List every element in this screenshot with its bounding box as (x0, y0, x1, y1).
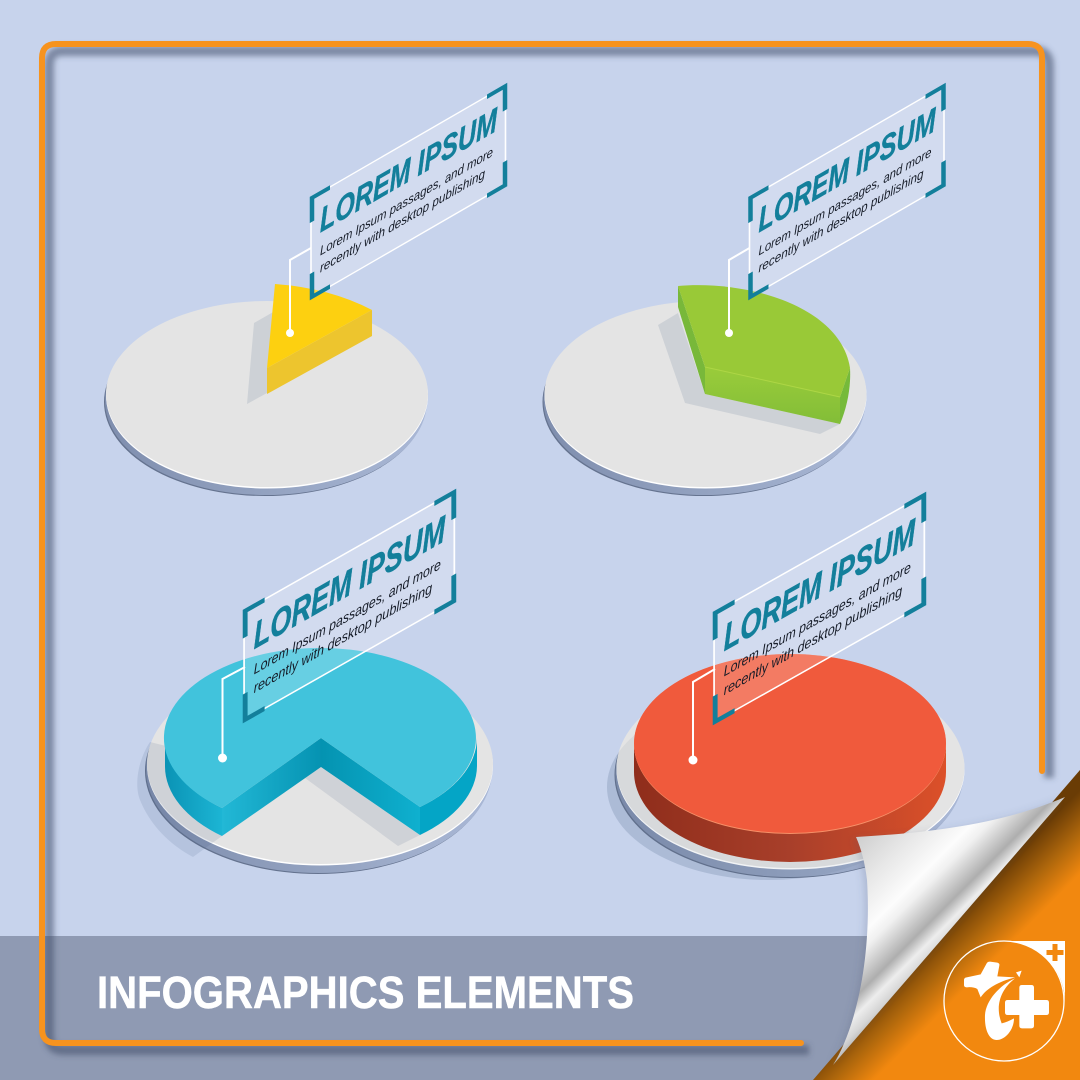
label card: Lorem Ipsum passages, and more (254, 556, 441, 678)
logo corner with plus (1004, 941, 1065, 1002)
label card: recently with desktop publishing (254, 580, 433, 697)
label card: Lorem Ipsum passages, and more (724, 559, 911, 680)
label card: LOREM IPSUM (320, 99, 498, 240)
leader line and dot (286, 248, 311, 337)
panel: cyan three-quarter pie (137, 492, 493, 874)
cyan pie body (164, 648, 477, 836)
green slice (678, 285, 850, 424)
title: INFOGRAPHICS ELEMENTS (97, 967, 634, 1018)
panel: red full pie (607, 495, 964, 880)
panel: green slice pie (542, 86, 944, 496)
disc base (145, 664, 493, 874)
label card (244, 492, 454, 720)
label card (750, 86, 944, 297)
title band (0, 936, 880, 1080)
label card: recently with desktop publishing (320, 165, 485, 275)
label card: Lorem Ipsum passages, and more (320, 144, 493, 258)
label card: recently with desktop publishing (724, 582, 903, 699)
leader line and dot (725, 248, 750, 337)
leader line and dot (218, 667, 245, 762)
label card (714, 495, 924, 722)
leader line and dot (688, 669, 715, 764)
yellow slice (267, 284, 372, 394)
page curl shadow (830, 799, 1062, 1067)
page curl (833, 797, 1065, 1065)
disc base (104, 301, 428, 496)
slice shadow (247, 311, 275, 404)
label card: LOREM IPSUM (724, 511, 916, 660)
label card (311, 86, 506, 297)
red pie body (634, 654, 946, 862)
slice shadow (658, 313, 840, 434)
ground shadow (607, 694, 929, 880)
label card: recently with desktop publishing (758, 165, 924, 275)
logo mark (964, 962, 1049, 1040)
panel: yellow slice pie (104, 86, 506, 496)
label card: Lorem Ipsum passages, and more (758, 144, 932, 258)
label card: LOREM IPSUM (254, 508, 446, 658)
logo ring (944, 941, 1064, 1061)
label card: LOREM IPSUM (758, 99, 936, 240)
disc base (542, 301, 866, 496)
disc base (607, 668, 964, 880)
logo (944, 941, 1065, 1061)
orange page corner (813, 770, 1080, 1080)
cast shadows (137, 742, 420, 857)
